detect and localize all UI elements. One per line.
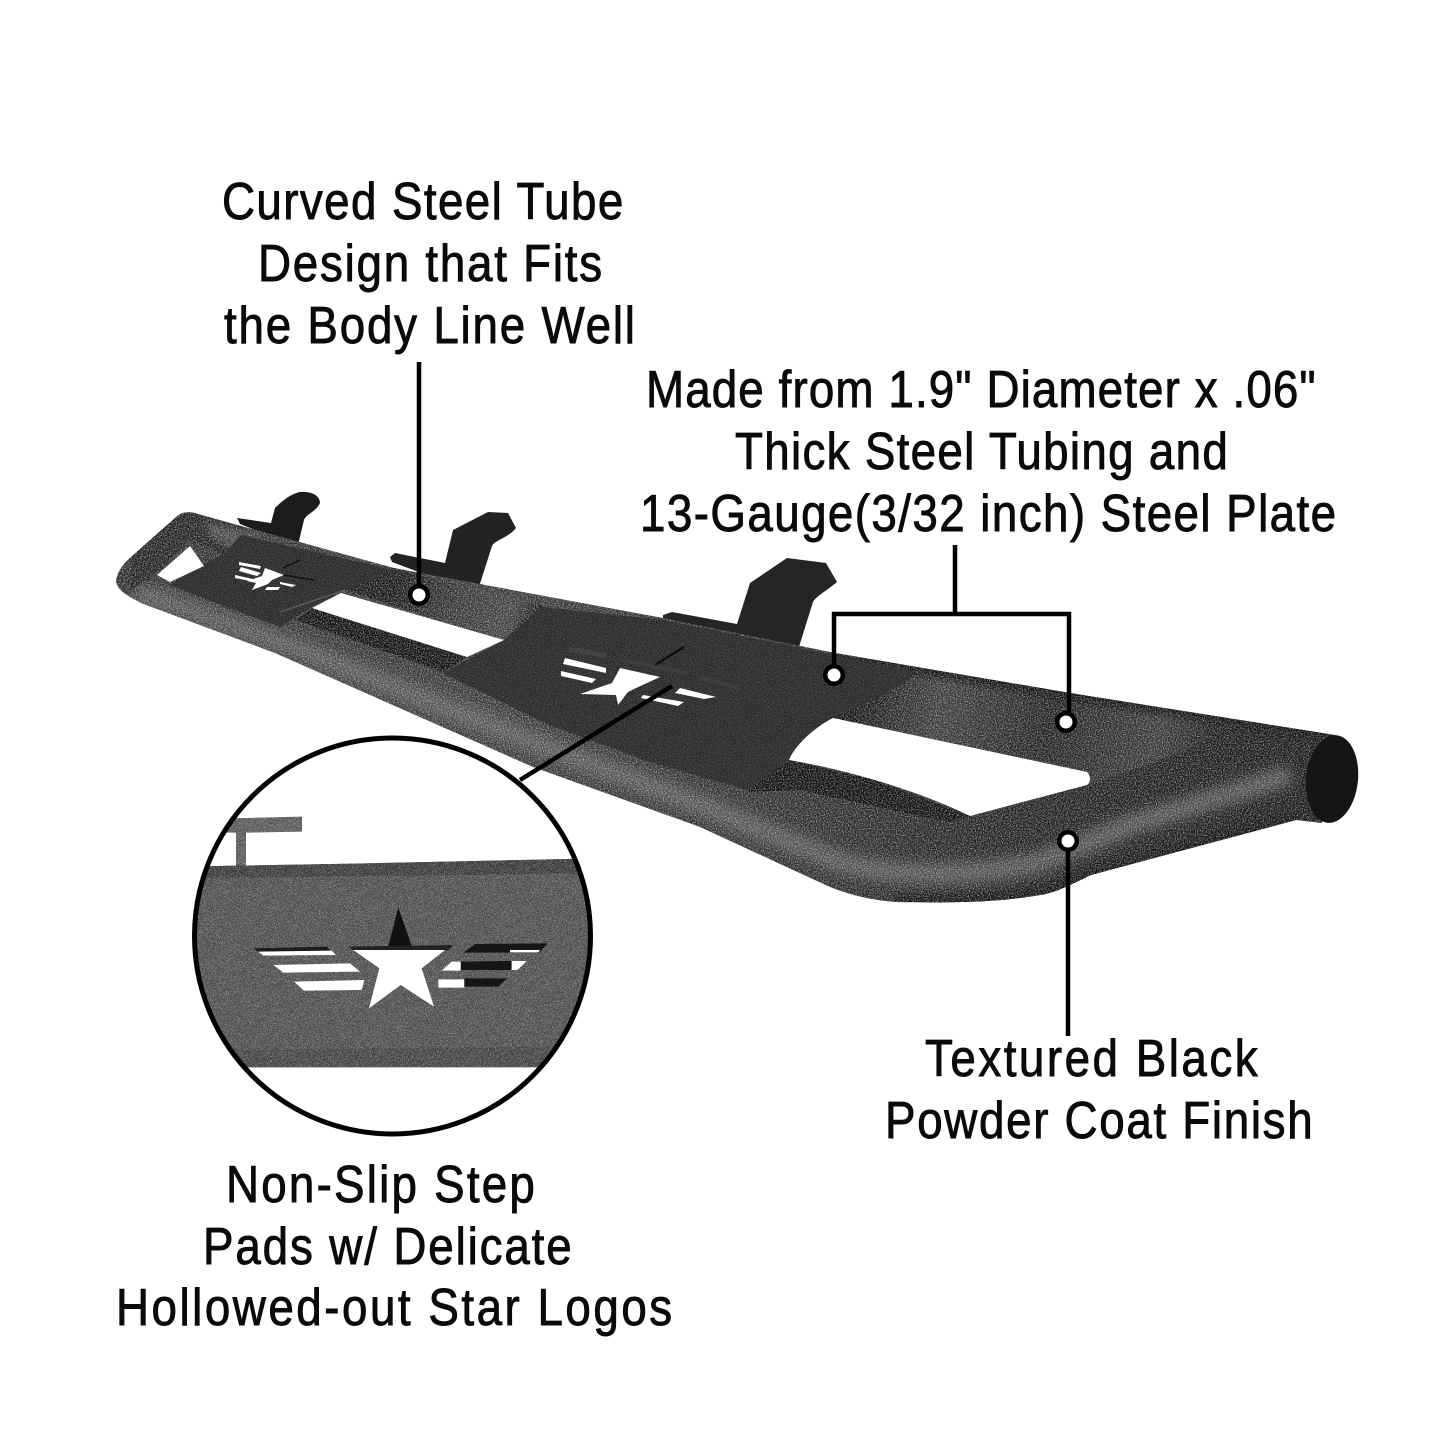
- callout: star logo leader: [520, 686, 672, 780]
- finish text: Powder Coat Finish: [885, 1092, 1313, 1150]
- inset text: [116, 1156, 672, 1337]
- mounting bracket 1: [237, 492, 320, 545]
- leader line: [417, 362, 421, 586]
- star logo small: [235, 560, 314, 590]
- lower inner tube right: [748, 755, 970, 822]
- corner tube highlight: [205, 522, 259, 548]
- material text: [640, 361, 1336, 543]
- mounting bracket 3: [663, 558, 837, 650]
- material text: Thick Steel Tubing and: [735, 423, 1228, 481]
- plate texture overlay: [160, 530, 930, 800]
- finish text: Textured Black: [925, 1030, 1258, 1088]
- rear tube top shadow: [835, 653, 1335, 735]
- middle window opening: [312, 593, 504, 657]
- callout: curved steel tube: [222, 173, 635, 604]
- magnifier ring: [194, 738, 590, 1134]
- marker dot right: [1057, 713, 1075, 731]
- rear tube left section: [345, 568, 545, 640]
- inset texture: [180, 813, 600, 1067]
- inset text: Non-Slip Step: [226, 1156, 535, 1214]
- left wing: [253, 947, 331, 952]
- heading text: Curved Steel Tube: [222, 173, 623, 231]
- tube texture overlay: [110, 500, 1350, 910]
- lower edge shadow right: [896, 820, 1296, 902]
- bracket leader: [832, 545, 1071, 713]
- finish text: [885, 1030, 1313, 1150]
- heading text: Design that Fits: [258, 235, 602, 293]
- inset plate: [180, 858, 600, 1067]
- plate flange edges: [165, 588, 345, 632]
- marker dot: [1059, 832, 1077, 850]
- product: side step running board: [110, 492, 1362, 910]
- heading text: [222, 173, 635, 355]
- heading text: the Body Line Well: [224, 297, 635, 355]
- right window opening: [789, 718, 1090, 816]
- step plate small: [169, 535, 394, 627]
- star logo large: [561, 647, 740, 706]
- corner tube: [130, 512, 250, 590]
- rail body: [116, 512, 1335, 902]
- end cap: [1302, 733, 1362, 825]
- leader line: [1066, 850, 1070, 1036]
- mounting bracket 2: [390, 512, 516, 590]
- callout: material: [640, 361, 1336, 731]
- inset magnifier: star logo: [116, 738, 672, 1337]
- inset text: Hollowed-out Star Logos: [116, 1279, 672, 1337]
- rear tube right section: [834, 677, 1202, 786]
- left window opening: [157, 546, 204, 582]
- callout: powder coat finish: [885, 832, 1313, 1150]
- marker dot: [410, 586, 428, 604]
- lower inner tube left: [296, 608, 467, 672]
- step plate large: [443, 607, 917, 790]
- right wing: [463, 943, 548, 953]
- inset text: Pads w/ Delicate: [203, 1218, 572, 1276]
- material text: 13-Gauge(3/32 inch) Steel Plate: [640, 485, 1336, 543]
- front tube highlight: [135, 592, 1290, 874]
- star cut-out: [388, 907, 412, 946]
- material text: Made from 1.9" Diameter x .06": [646, 361, 1316, 419]
- inset bracket: [227, 817, 302, 867]
- marker dot left: [825, 666, 843, 684]
